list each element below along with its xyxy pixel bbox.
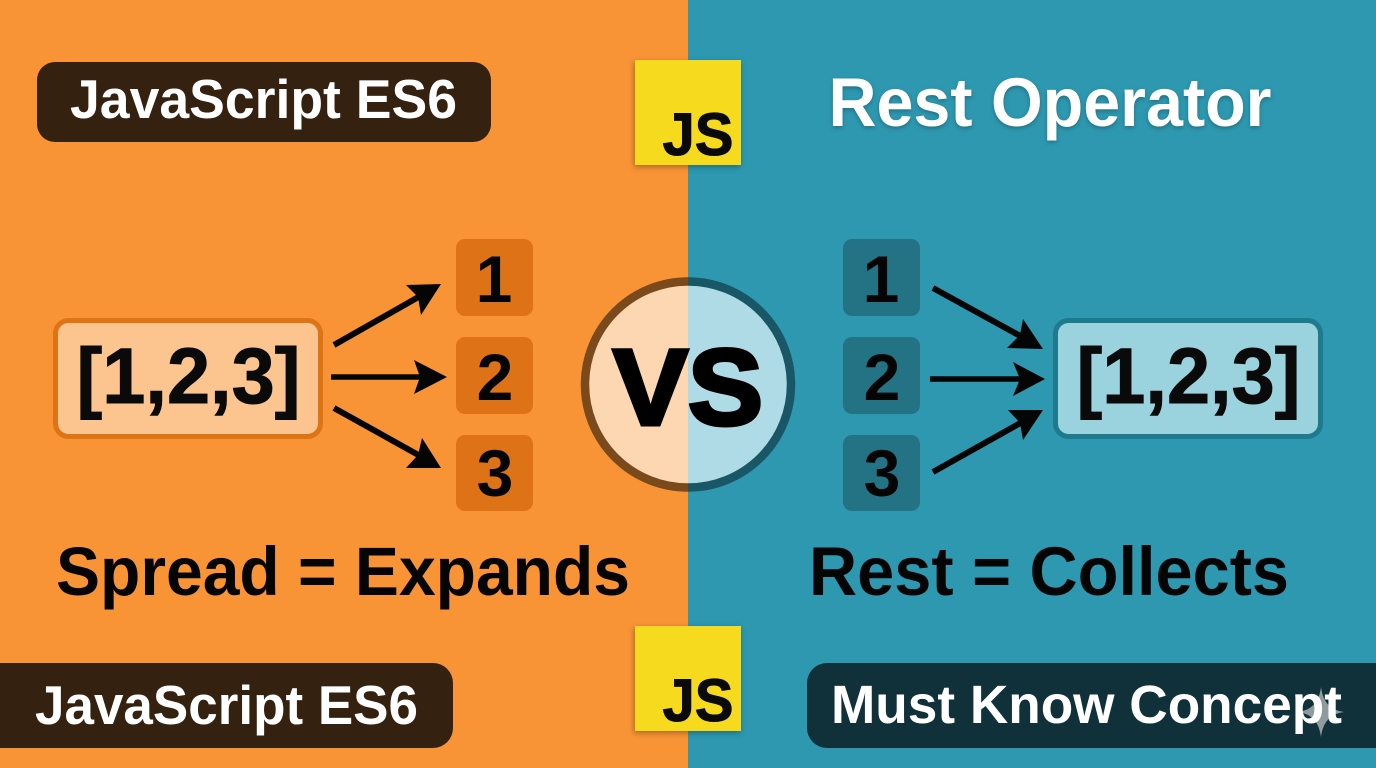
right arrows: collecting: [930, 288, 1045, 472]
icon: bottom JS logo: [635, 626, 741, 734]
left array box: [1,2,3]: [76, 331, 300, 420]
bottom left badge: JavaScript ES6: JavaScript ES6: [35, 674, 418, 736]
caption: Rest = Collects: Rest = Collects: [809, 533, 1289, 610]
left arrows: expanding: [331, 284, 447, 468]
icon: bottom JS logo: JS: [662, 667, 734, 734]
panel: right teal background: [688, 0, 1376, 768]
right array box: [1056, 320, 1320, 436]
left number tiles: 2: [477, 340, 513, 414]
top left badge: JavaScript ES6: JavaScript ES6: [70, 68, 457, 130]
left number tiles: 1: [476, 242, 512, 316]
left number tiles: 3: [477, 436, 513, 510]
left number tiles: [456, 239, 533, 511]
panel: left orange background: [0, 0, 688, 768]
bottom right badge: Must Know Concept: Must Know Concept: [831, 675, 1342, 735]
right number tiles: [843, 239, 920, 511]
right number tiles: 1: [863, 242, 899, 316]
bottom right badge: Must Know Concept: [807, 663, 1376, 748]
VS circle: [585, 282, 791, 488]
right array box: [1,2,3]: [1076, 331, 1300, 420]
bottom left badge: JavaScript ES6: [0, 663, 453, 748]
right number tiles: 2: [864, 340, 900, 414]
icon: sparkle watermark: [1298, 687, 1344, 737]
icon: top JS logo: [635, 60, 741, 168]
caption: Spread = Expands: Spread = Expands: [56, 533, 630, 610]
VS circle: VS: [613, 326, 763, 448]
top left badge: JavaScript ES6: [37, 62, 491, 142]
right number tiles: 3: [864, 436, 900, 510]
left array box: [56, 320, 320, 436]
heading: Rest Operator: Rest Operator: [828, 64, 1272, 141]
icon: top JS logo: JS: [662, 101, 734, 168]
